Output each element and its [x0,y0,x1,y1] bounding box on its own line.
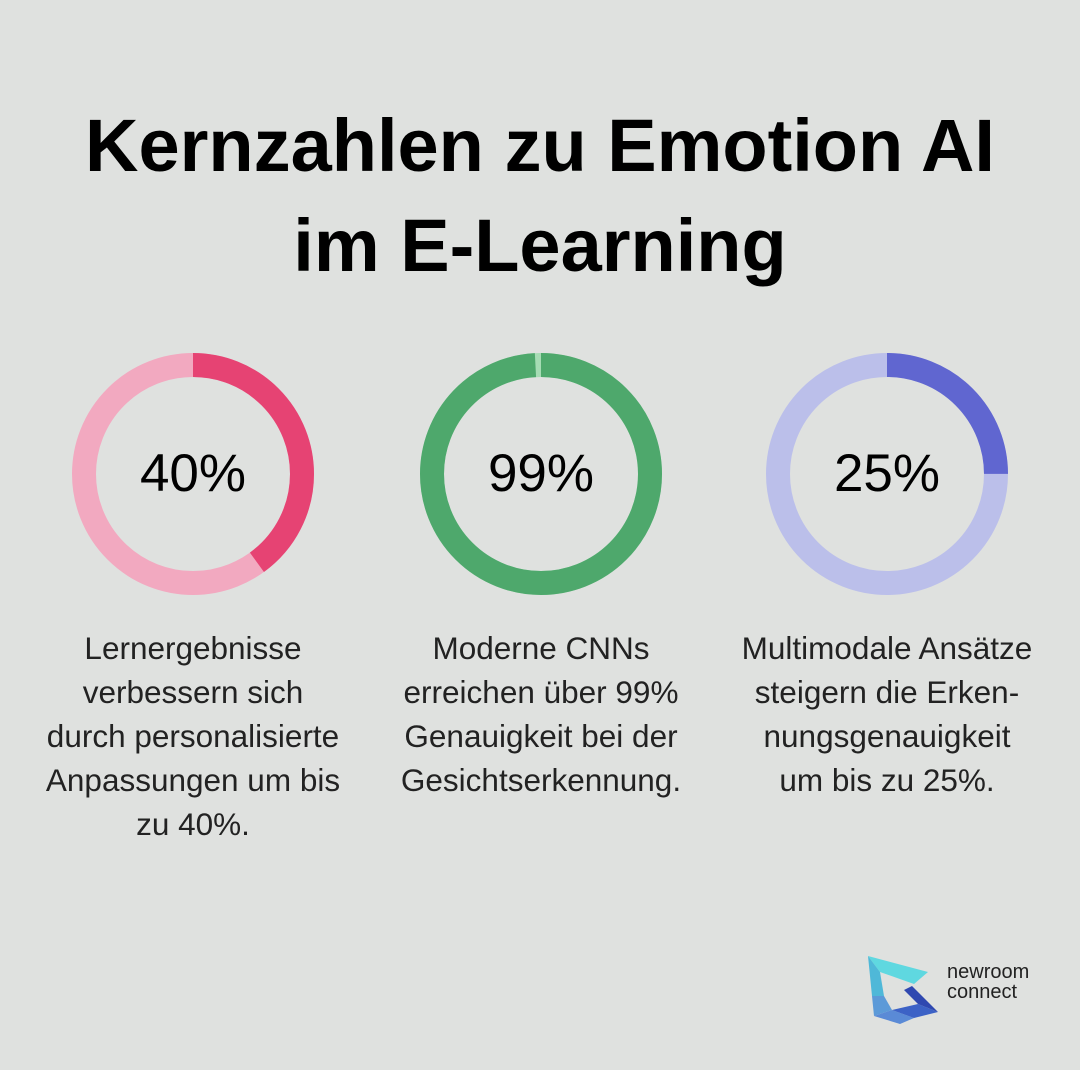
caption 1: Lernergebnisse [84,630,302,666]
logo [868,956,1029,1024]
caption 2: erreichen über 99% [404,674,678,710]
caption 2: Gesichtserkennung. [401,762,681,798]
donut: 40%: 40% [140,444,246,503]
donut: 25%: 25% [834,444,940,503]
logo: connect [947,981,1017,1003]
donut: 40% [72,353,314,595]
caption 2: Genauigkeit bei der [404,718,678,754]
donut: 25% [766,353,1008,595]
logo: newroom [947,961,1029,983]
caption 1 [46,630,340,842]
title: Kernzahlen zu Emotion AI [85,104,995,187]
caption 1: verbessern sich [83,674,303,710]
title [85,104,995,287]
title: im E-Learning [293,204,787,287]
caption 1: zu 40%. [136,806,250,842]
caption 3: steigern die Erken- [755,674,1019,710]
caption 2 [401,630,681,798]
donut: 99%: 99% [488,444,594,503]
caption 1: Anpassungen um bis [46,762,340,798]
caption 3: nungsgenauigkeit [764,718,1010,754]
caption 2: Moderne CNNs [432,630,650,666]
caption 3 [742,630,1032,798]
caption 1: durch personalisierte [47,718,339,754]
caption 3: Multimodale Ansätze [742,630,1032,666]
donut: 99% [420,353,662,595]
caption 3: um bis zu 25%. [779,762,995,798]
